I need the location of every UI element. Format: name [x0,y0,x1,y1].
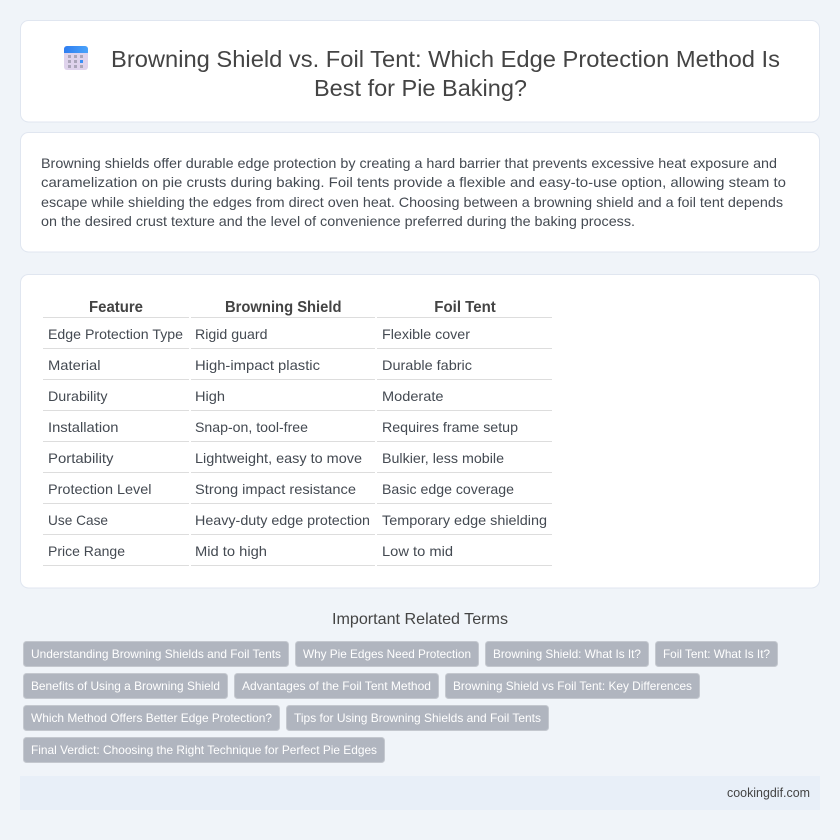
footer bar: cookingdif.com [727,786,810,800]
table rows: Durability [48,388,108,404]
table header: Feature [89,299,143,316]
table rows: Moderate [382,388,444,404]
table rows: Flexible cover [382,326,470,342]
panel: comparison table [20,274,820,588]
table header: Browning Shield [225,299,342,316]
table rows: Lightweight, easy to move [195,450,362,466]
table rows: Use Case [48,512,108,528]
title text: Best for Pie Baking? [314,75,527,101]
table rows: Basic edge coverage [382,481,514,497]
table rows: Installation [48,419,118,435]
table rows: Snap-on, tool-free [195,419,308,435]
icon: calendar [64,46,88,70]
table rows: Bulkier, less mobile [382,450,504,466]
tag list: Tips for Using Browning Shields and Foil Tents [294,711,541,725]
heading: related terms: Important Related Terms [332,611,508,628]
intro paragraph: caramelization on pie crusts during baking. Foil tents provide a flexible and easy-to-use option, allowing steam to [41,174,786,190]
table header: Foil Tent [434,299,496,316]
table rows: Temporary edge shielding [382,512,547,528]
table rows: Portability [48,450,114,466]
table rows: Mid to high [195,543,267,559]
table rows: Heavy-duty edge protection [195,512,370,528]
tag list: Foil Tent: What Is It? [663,647,770,661]
table rows: Protection Level [48,481,152,497]
tag list: Understanding Browning Shields and Foil Tents [31,647,281,661]
intro paragraph: escape while shielding the edges from direct oven heat. Choosing between a browning shield and a foil tent depends [41,194,783,210]
tag list: Benefits of Using a Browning Shield [31,679,220,693]
table rows: Requires frame setup [382,419,518,435]
panel: title [20,20,820,122]
footer bar [20,776,820,810]
tag list: Which Method Offers Better Edge Protection? [31,711,272,725]
table rows: Rigid guard [195,326,268,342]
table rows: Strong impact resistance [195,481,356,497]
tag list: Browning Shield vs Foil Tent: Key Differences [453,679,692,693]
table rows: Low to mid [382,543,453,559]
intro paragraph: on the desired crust texture and the level of convenience preferred during the baking process. [41,213,635,229]
tag list: Advantages of the Foil Tent Method [242,679,431,693]
tag list: Why Pie Edges Need Protection [303,647,471,661]
table rows: High-impact plastic [195,357,320,373]
table rows: Material [48,357,100,373]
intro paragraph: Browning shields offer durable edge protection by creating a hard barrier that prevents excessive heat exposure and [41,155,777,171]
table header [89,299,496,316]
table rows: Price Range [48,543,125,559]
tag list: Final Verdict: Choosing the Right Technique for Perfect Pie Edges [31,743,377,757]
panel: intro [20,132,820,252]
table rows: Edge Protection Type [48,326,183,342]
tag list: Browning Shield: What Is It? [493,647,641,661]
table rows [48,326,547,559]
tag list [24,642,778,762]
title text: Browning Shield vs. Foil Tent: Which Edge Protection Method Is [111,46,780,72]
table rows: High [195,388,225,404]
table rows: Durable fabric [382,357,472,373]
